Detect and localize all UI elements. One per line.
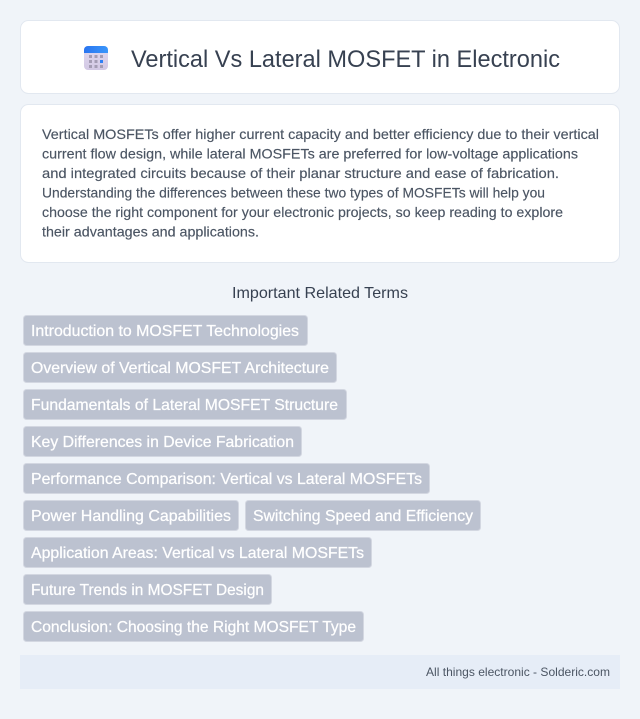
term chip	[24, 612, 364, 642]
footer credit: All things electronic - Solderic.com	[426, 665, 610, 679]
panel: description	[20, 104, 620, 262]
term chip	[24, 352, 336, 382]
term chip	[24, 316, 308, 346]
term chip	[24, 500, 238, 530]
text block: description: current flow design, while lateral MOSFETs are preferred for low-voltage applications	[42, 146, 578, 162]
text block: description: Vertical MOSFETs offer higher current capacity and better efficiency due to their vertical	[42, 126, 599, 142]
term chip: Switching Speed and Efficiency	[253, 508, 473, 525]
panel: header	[20, 20, 620, 94]
text block: description: and integrated circuits because of their planar structure and ease of fabrication.	[42, 165, 559, 181]
term chip	[246, 500, 480, 530]
icon: calendar	[84, 46, 108, 70]
text block: description	[42, 126, 599, 240]
term chip: Fundamentals of Lateral MOSFET Structure	[31, 397, 338, 414]
term chip: Future Trends in MOSFET Design	[31, 582, 264, 599]
term chip: Introduction to MOSFET Technologies	[31, 323, 299, 340]
term chip	[24, 538, 372, 568]
text block: description: choose the right component for your electronic projects, so keep reading to explore	[42, 204, 563, 220]
term chip	[24, 390, 346, 420]
term chip	[24, 574, 272, 604]
text block: description: Understanding the differences between these two types of MOSFETs will help you	[42, 184, 545, 200]
footer	[20, 655, 620, 689]
term chip: Performance Comparison: Vertical vs Lateral MOSFETs	[31, 471, 422, 488]
panel: related terms	[24, 316, 480, 642]
term chip: Power Handling Capabilities	[31, 508, 231, 525]
term chip	[24, 464, 430, 494]
term chip	[24, 426, 302, 456]
title: Vertical Vs Lateral MOSFET in Electronic	[131, 46, 560, 73]
term chip: Application Areas: Vertical vs Lateral MOSFETs	[31, 545, 364, 562]
heading: related terms: Important Related Terms	[232, 285, 408, 302]
term chip: Conclusion: Choosing the Right MOSFET Type	[31, 619, 356, 636]
text block: description: their advantages and applications.	[42, 224, 259, 240]
term chip: Overview of Vertical MOSFET Architecture	[31, 360, 329, 377]
term chip: Key Differences in Device Fabrication	[31, 434, 294, 451]
